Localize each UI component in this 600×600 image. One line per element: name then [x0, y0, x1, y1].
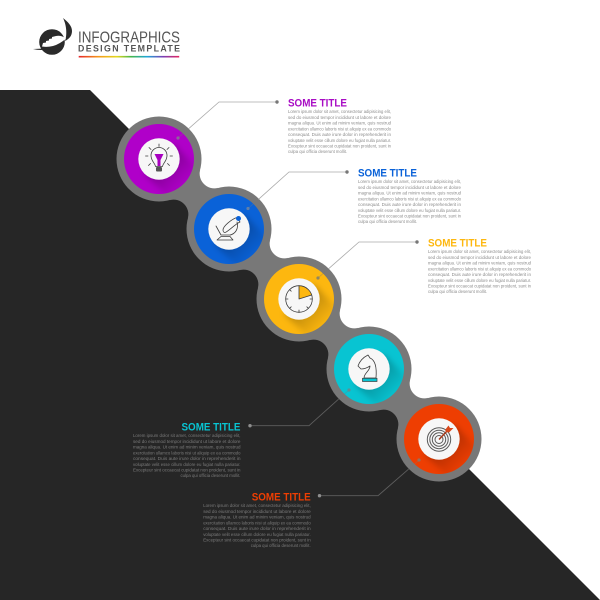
logo subtitle: DESIGN TEMPLATE — [78, 44, 180, 54]
body 4: Excepteur sint occaecat cupidatat non proident, sunt in — [133, 468, 241, 474]
title 5: SOME TITLE — [252, 491, 311, 503]
rainbow underline — [79, 56, 179, 58]
body 5: magna aliqua. Ut enim ad minim veniam, quis nostrud — [203, 515, 311, 521]
body 5: consequat. Duis aute irure dolor in reprehenderit in — [203, 526, 311, 532]
text block 5 — [203, 491, 311, 549]
text block 3 — [428, 237, 531, 295]
logo title: INFOGRAPHICS — [78, 30, 180, 46]
body 2: magna aliqua. Ut enim ad minim veniam, quis nostrud — [358, 191, 461, 197]
body 5: Lorem ipsum dolor sit amet, consectetur adipisicing elit, — [203, 503, 311, 509]
body 2: Lorem ipsum dolor sit amet, consectetur adipisicing elit, — [358, 179, 461, 185]
icon: microscope — [216, 216, 241, 240]
body 2: exercitation ullamco laboris nisi ut aliquip ex ea commodo — [358, 196, 461, 202]
body 3 — [428, 249, 531, 295]
body 1: Excepteur sint occaecat cupidatat non proident, sunt in — [288, 144, 391, 150]
chain backdrop — [116, 116, 482, 482]
body 4: sed do eiusmod tempor incididunt ut labore et dolore — [133, 439, 241, 445]
body 3: consequat. Duis aute irure dolor in reprehenderit in — [428, 272, 531, 278]
text block 4 — [133, 421, 241, 479]
title 1: SOME TITLE — [288, 97, 347, 109]
body 5: voluptate velit esse cillum dolore eu fugiat nulla pariatur. — [203, 532, 311, 538]
body 4: voluptate velit esse cillum dolore eu fugiat nulla pariatur. — [133, 462, 240, 468]
body 3: Excepteur sint occaecat cupidatat non proident, sunt in — [428, 284, 531, 290]
text block 2 — [358, 167, 461, 225]
step 4 node — [334, 334, 404, 404]
body 5: Excepteur sint occaecat cupidatat non proident, sunt in — [203, 538, 311, 544]
connector 1 — [176, 100, 279, 140]
logo mark — [33, 18, 72, 55]
connector 2 — [246, 170, 349, 210]
body 4: magna aliqua. Ut enim ad minim veniam, quis nostrud — [133, 445, 241, 451]
title 4: SOME TITLE — [182, 421, 241, 433]
body 5 — [203, 503, 311, 549]
step 3 node — [264, 264, 334, 334]
logo — [33, 18, 180, 58]
body 2: sed do eiusmod tempor incididunt ut labore et dolore — [358, 185, 461, 191]
body 4: culpa qui officia deserunt mollit. — [180, 473, 240, 479]
icon: clock — [286, 286, 312, 312]
body 1 — [288, 109, 391, 155]
body 2 — [358, 179, 461, 225]
icon: target with arrow — [427, 426, 454, 451]
body 2: Excepteur sint occaecat cupidatat non proident, sunt in — [358, 214, 461, 220]
body 1: culpa qui officia deserunt mollit. — [288, 149, 347, 155]
body 1: exercitation ullamco laboris nisi ut aliquip ex ea commodo — [288, 126, 391, 132]
body 1: magna aliqua. Ut enim ad minim veniam, quis nostrud — [288, 121, 391, 127]
body 3: sed do eiusmod tempor incididunt ut labore et dolore — [428, 255, 531, 261]
body 3: Lorem ipsum dolor sit amet, consectetur adipisicing elit, — [428, 249, 531, 255]
body 5: exercitation ullamco laboris nisi ut aliquip ex ea commodo — [203, 520, 311, 526]
body 2: consequat. Duis aute irure dolor in reprehenderit in — [358, 202, 461, 208]
body 2: voluptate velit esse cillum dolore eu fugiat nulla pariatur. — [358, 208, 461, 214]
step 5 node — [404, 404, 474, 474]
body 1: sed do eiusmod tempor incididunt ut labore et dolore — [288, 115, 391, 121]
body 5: culpa qui officia deserunt mollit. — [251, 543, 311, 549]
body 3: exercitation ullamco laboris nisi ut aliquip ex ea commodo — [428, 266, 531, 272]
text block 1 — [288, 97, 391, 155]
body 5: sed do eiusmod tempor incididunt ut labore et dolore — [203, 509, 311, 515]
icon: light bulb — [146, 144, 172, 172]
connector 5 — [318, 458, 421, 497]
title 3: SOME TITLE — [428, 237, 487, 249]
body 4: consequat. Duis aute irure dolor in reprehenderit in — [133, 456, 241, 462]
title 2: SOME TITLE — [358, 167, 417, 179]
step 1 node — [124, 124, 194, 194]
body 2: culpa qui officia deserunt mollit. — [358, 219, 417, 225]
body 4: Lorem ipsum dolor sit amet, consectetur adipisicing elit, — [133, 433, 240, 439]
body 3: voluptate velit esse cillum dolore eu fugiat nulla pariatur. — [428, 278, 531, 284]
body 1: voluptate velit esse cillum dolore eu fugiat nulla pariatur. — [288, 138, 391, 144]
body 3: magna aliqua. Ut enim ad minim veniam, quis nostrud — [428, 261, 531, 267]
body 4: exercitation ullamco laboris nisi ut aliquip ex ea commodo — [133, 450, 241, 456]
icon: chess knight — [358, 355, 377, 382]
connector 4 — [248, 388, 351, 427]
body 1: consequat. Duis aute irure dolor in reprehenderit in — [288, 132, 391, 138]
body 3: culpa qui officia deserunt mollit. — [428, 289, 487, 295]
step 2 node — [194, 194, 264, 264]
body 4 — [133, 433, 241, 479]
body 1: Lorem ipsum dolor sit amet, consectetur adipisicing elit, — [288, 109, 391, 115]
connector 3 — [316, 240, 419, 280]
